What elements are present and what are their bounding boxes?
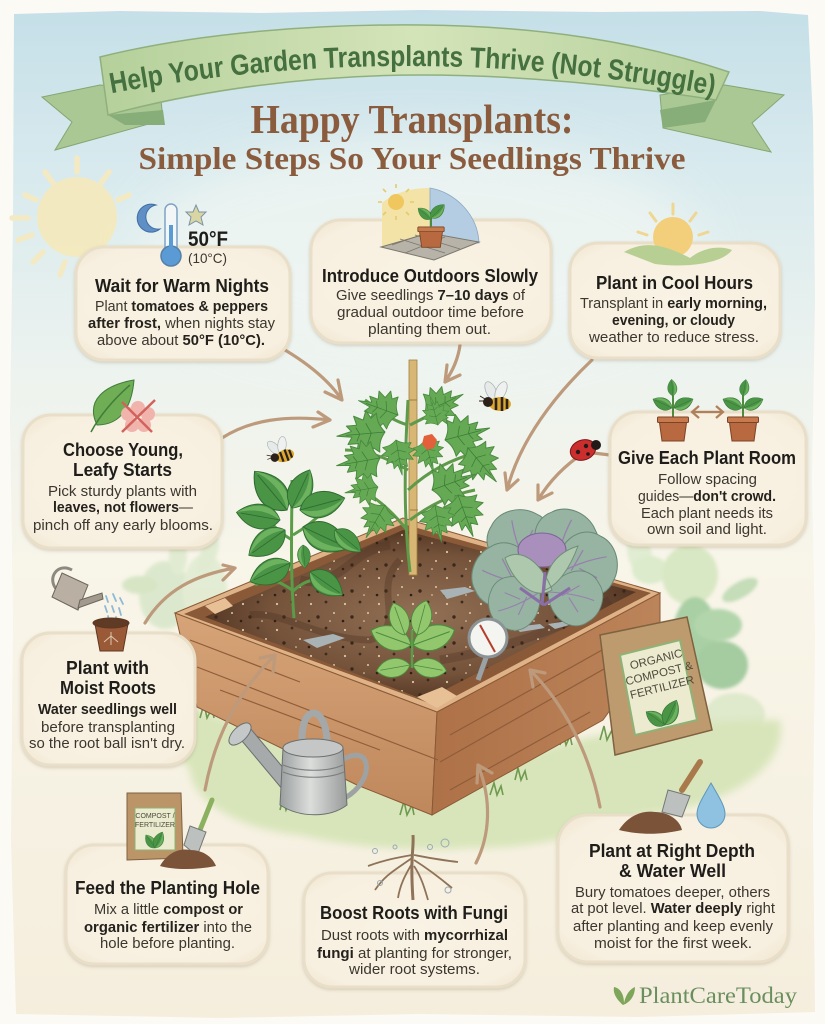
heading: Boost Roots with Fungi <box>320 902 508 923</box>
compost bag <box>600 617 712 755</box>
body text <box>571 884 776 952</box>
body text <box>88 298 275 349</box>
body text: Follow spacing <box>658 471 757 488</box>
heading: Introduce Outdoors Slowly <box>322 265 539 286</box>
arrow: fungi <box>476 765 492 863</box>
panel: plant in cool hours <box>570 204 780 358</box>
body text: organic fertilizer into the <box>84 919 252 936</box>
arrow: planting hole <box>205 655 275 790</box>
grass tufts <box>200 704 614 815</box>
ribbon main <box>100 25 729 115</box>
compost bag: FERTILIZER <box>629 674 696 702</box>
bed rim <box>175 518 660 712</box>
body text: planting them out. <box>368 321 491 338</box>
icon: water drop <box>697 783 725 828</box>
body text <box>33 483 213 534</box>
heading: Plant in Cool Hours <box>596 272 753 293</box>
heading <box>63 439 183 480</box>
background foliage right <box>623 531 765 737</box>
icon: crossed flower <box>121 400 155 432</box>
icon: leaf <box>91 380 134 432</box>
soil <box>205 530 636 700</box>
panel: choose young leafy starts <box>23 380 222 548</box>
temperature celsius: (10°C) <box>188 250 227 266</box>
icon: right potted seedling <box>721 379 765 441</box>
title: Happy Transplants: <box>250 96 574 142</box>
icon: star <box>186 205 206 225</box>
arrow: moist roots <box>145 565 235 623</box>
icon: small watering can <box>52 568 103 610</box>
raised wooden bed <box>175 518 660 815</box>
body text: Bury tomatoes deeper, others <box>575 884 770 901</box>
icon: water drops <box>105 594 123 622</box>
icon: fertilizer bag: FERTILIZER <box>135 822 175 829</box>
body text: so the root ball isn't dry. <box>29 735 185 752</box>
icon: fertilizer bag <box>127 793 183 860</box>
background foliage left <box>122 533 227 629</box>
panel: wait for warm nights <box>76 204 290 360</box>
grass patch <box>150 706 781 849</box>
tomato fruit <box>422 434 437 450</box>
body text: fungi at planting for stronger, <box>317 945 512 962</box>
arrow: leafy starts <box>222 412 330 438</box>
panel: give each plant room <box>610 379 806 545</box>
body text: Mix a little compost or <box>94 901 243 918</box>
panel: plant at right depth <box>558 762 788 962</box>
icon: roots <box>368 835 458 900</box>
heading: Feed the Planting Hole <box>75 877 260 898</box>
body text: weather to reduce stress. <box>588 329 759 346</box>
bee right <box>479 380 511 411</box>
body text: above about 50°F (10°C). <box>97 332 265 349</box>
banner text: Help Your Garden Transplants Thrive (Not Struggle) <box>109 45 714 100</box>
ladybug <box>567 436 601 464</box>
body text: before transplanting <box>41 719 175 736</box>
body text: Plant tomatoes & peppers <box>95 298 268 315</box>
body text <box>84 901 252 952</box>
icon: trowel and soil <box>160 800 216 869</box>
panel: plant with moist roots <box>22 568 195 765</box>
heading <box>589 840 755 881</box>
pale haze behind title <box>140 140 700 360</box>
seedling in bed <box>367 598 459 680</box>
icon: fertilizer bag: COMPOST / <box>135 813 175 820</box>
icon: moon <box>137 204 160 232</box>
bee left <box>261 433 296 467</box>
body text: evening, or cloudy <box>612 312 736 329</box>
body text: hole before planting. <box>100 935 235 952</box>
bed left face <box>175 613 437 815</box>
panel: feed the planting hole <box>66 793 268 964</box>
body text: at pot level. Water deeply right <box>571 900 776 917</box>
temperature label: 50°F <box>188 228 228 251</box>
body text: own soil and light. <box>647 521 767 538</box>
arrow: warm nights <box>285 350 342 400</box>
arrow: outdoors <box>445 345 460 382</box>
body text <box>580 295 767 346</box>
body text: Pick sturdy plants with <box>48 483 197 500</box>
body text: Each plant needs its <box>641 505 773 522</box>
heading: Leafy Starts <box>73 459 172 480</box>
subtitle: Simple Steps So Your Seedlings Thrive <box>138 140 686 176</box>
body text: guides—don't crowd. <box>638 488 776 505</box>
body text: Dust roots with mycorrhizal <box>321 927 508 944</box>
body text: wider root systems. <box>348 961 480 978</box>
ribbon right tail <box>660 85 784 152</box>
icon: left potted seedling <box>651 379 695 441</box>
heading: Moist Roots <box>60 677 156 698</box>
icon: spacing arrow <box>692 406 723 418</box>
heading: Give Each Plant Room <box>618 447 796 468</box>
arrow: cool hours <box>505 360 592 490</box>
rim corners <box>205 598 457 708</box>
body text: gradual outdoor time before <box>337 304 524 321</box>
ribbon left tail <box>42 85 163 150</box>
body text: after frost, when nights stay <box>88 315 275 332</box>
icon: sunrise over hills <box>624 204 732 265</box>
body text: Transplant in early morning, <box>580 295 767 312</box>
bed right face <box>432 593 660 815</box>
tomato plant with stake <box>333 360 512 575</box>
body text <box>29 701 185 752</box>
icon: patio with seedling <box>378 184 479 260</box>
watering can <box>225 713 366 815</box>
body text <box>336 287 526 338</box>
body text: moist for the first week. <box>594 935 752 952</box>
body text <box>638 471 776 538</box>
compost bag: COMPOST & <box>624 660 694 688</box>
icon: thermometer <box>161 204 181 266</box>
banner <box>41 24 785 153</box>
body text: leaves, not flowers— <box>53 499 193 516</box>
compost bag: ORGANIC <box>629 648 684 672</box>
arrow: plant room <box>538 452 610 500</box>
logo: PlantCareToday: PlantCareToday <box>639 983 798 1008</box>
body text: pinch off any early blooms. <box>33 517 213 534</box>
pepper plant <box>234 462 367 618</box>
icon: trowel in soil <box>619 762 700 834</box>
body text: after planting and keep evenly <box>573 918 773 935</box>
icon: pot with roots <box>93 618 129 651</box>
soil thermometer gauge <box>469 619 507 680</box>
heading: Plant with <box>66 657 149 678</box>
ornamental cabbage <box>463 500 625 637</box>
heading <box>60 657 156 698</box>
body text: Give seedlings 7–10 days of <box>336 287 526 304</box>
heading: & Water Well <box>619 860 726 881</box>
heading: Wait for Warm Nights <box>95 275 269 296</box>
heading: Plant at Right Depth <box>589 840 755 861</box>
panel: introduce outdoors <box>311 184 551 343</box>
sun illustration <box>12 158 129 275</box>
arrow: right depth <box>530 670 600 807</box>
body text: Water seedlings well <box>38 701 177 718</box>
panel: boost roots with fungi <box>304 835 525 987</box>
body text <box>317 927 512 978</box>
heading: Choose Young, <box>63 439 183 460</box>
